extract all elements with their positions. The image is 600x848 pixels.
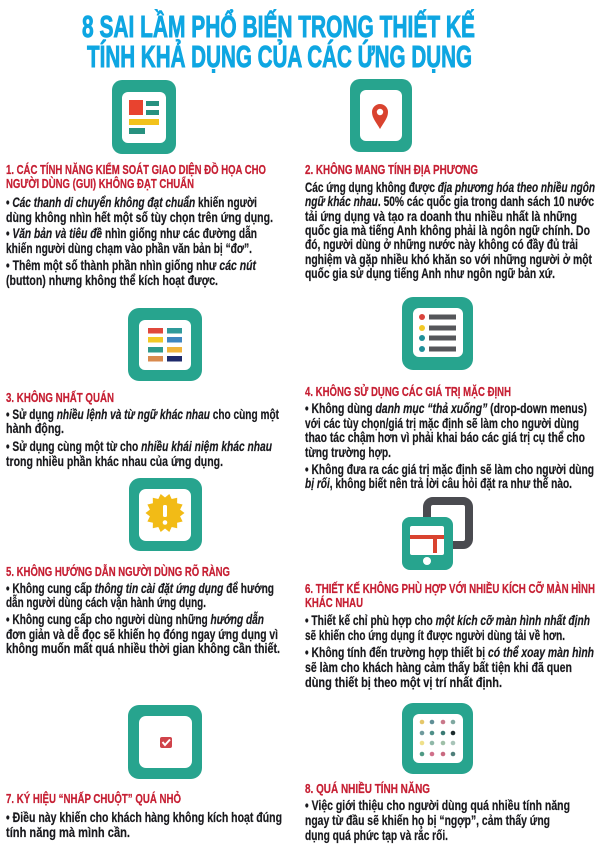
heading 2: 2. KHÔNG MANG TÍNH ĐỊA PHƯƠNG (305, 162, 478, 177)
text block 1: dùng không nhìn hết một số tùy chọn trên ứng dụng. (6, 210, 273, 225)
text block 1: • Các thanh di chuyển không đạt chuẩn khiến người (6, 195, 257, 210)
text block 5: dẫn người dùng cách vận hành ứng dụng. (6, 595, 206, 610)
heading 1 (6, 162, 266, 191)
icon: list with dots (402, 297, 473, 370)
text block 8: dụng quá phức tạp và rắc rối. (305, 828, 448, 843)
panel: mistake 5 (6, 478, 280, 656)
text block 1 (6, 195, 273, 288)
text block 3: • Sử dụng cùng một từ cho nhiều khái niệm khác nhau (6, 439, 273, 454)
text block 1: • Thêm một số thành phần nhìn giống như các nút (6, 258, 256, 273)
text block 5: • Không cung cấp cho người dùng những hướng dẫn (6, 612, 264, 627)
panel: mistake 8 (305, 703, 570, 843)
text block 4 (305, 401, 594, 491)
text block 7 (6, 810, 282, 840)
text block 7: tính năng mà mình cần. (6, 825, 130, 840)
heading 8: 8. QUÁ NHIỀU TÍNH NĂNG (305, 781, 430, 796)
text block 6: dùng thiết bị theo một vị trí nhất định. (305, 675, 502, 690)
icon: warning badge (129, 478, 202, 551)
panel: mistake 4 (305, 297, 594, 491)
panel: mistake 7 (6, 705, 282, 840)
text block 5: không muốn mất quá nhiều thời gian không cần thiết. (6, 641, 280, 656)
text block 2 (305, 180, 595, 281)
text block 1: (button) nhưng không thể kích hoạt được. (6, 273, 218, 288)
heading 3: 3. KHÔNG NHẤT QUÁN (6, 390, 114, 405)
icon: crowded feature grid (402, 703, 473, 774)
title (82, 8, 475, 74)
panel: mistake 2 (305, 79, 595, 281)
heading 1: 1. CÁC TÍNH NĂNG KIỂM SOÁT GIAO DIỆN ĐỒ HỌA CHO (6, 162, 266, 177)
panel: mistake 3 (6, 308, 279, 469)
panel: mistake 6 (305, 501, 595, 690)
heading 6 (305, 581, 595, 610)
heading 6: KHÁC NHAU (305, 595, 363, 610)
icon: two screen sizes (402, 501, 469, 570)
text block 6 (305, 613, 594, 690)
icon: inconsistent colour bars (128, 308, 202, 381)
text block 1: khiến người dùng chạm vào phần văn bản bị “đơ”. (6, 241, 252, 256)
icon: location pin (350, 79, 412, 152)
text block 1: • Văn bản và tiêu đề nhìn giống như các đường dẫn (6, 226, 257, 241)
heading 7: 7. KÝ HIỆU “NHẤP CHUỘT” QUÁ NHỎ (6, 791, 181, 806)
text block 7: • Điều này khiến cho khách hàng không kích hoạt đúng (6, 810, 282, 825)
text block 5: • Không cung cấp thông tin cài đặt ứng dụng để hướng (6, 581, 274, 596)
text block 5 (6, 581, 280, 656)
icon: tiny checkbox (128, 705, 202, 779)
heading 1: NGƯỜI DÙNG (GUI) KHÔNG ĐẠT CHUẨN (6, 176, 194, 191)
text block 4: từng trường hợp. (305, 445, 391, 460)
text block 3: trong nhiều phần khác nhau của ứng dụng. (6, 454, 223, 469)
text block 5: đơn giản và dễ đọc sẽ khiến họ đóng ngay ứng dụng vì (6, 627, 278, 642)
text block 8 (305, 798, 570, 843)
panel: mistake 1 (6, 80, 273, 288)
icon: interface layout (112, 80, 176, 154)
heading 4: 4. KHÔNG SỬ DỤNG CÁC GIÁ TRỊ MẶC ĐỊNH (305, 384, 511, 399)
text block 3: • Sử dụng nhiều lệnh và từ ngữ khác nhau cho cùng một (6, 407, 279, 422)
text block 3 (6, 407, 279, 469)
text block 3: hành động. (6, 421, 64, 436)
heading 5: 5. KHÔNG HƯỚNG DẪN NGƯỜI DÙNG RÕ RÀNG (6, 564, 230, 579)
